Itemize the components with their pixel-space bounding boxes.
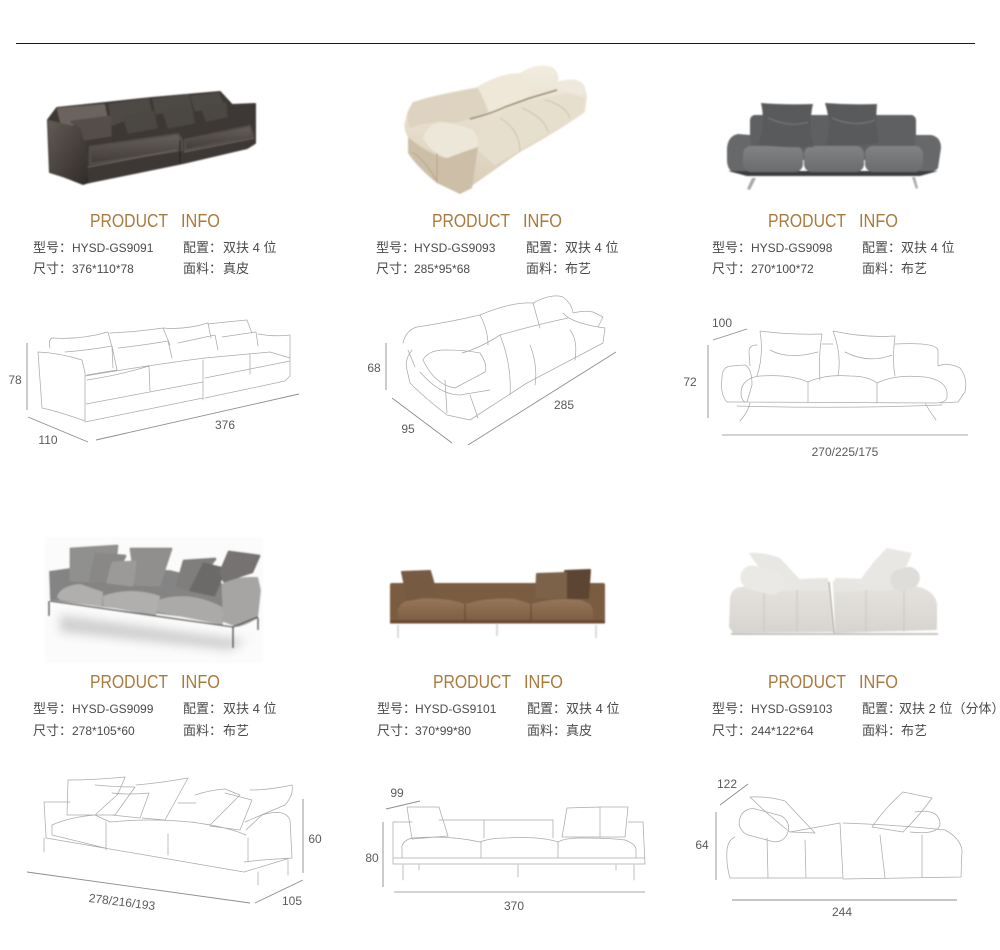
photo: grey sofa with cushions xyxy=(45,537,263,663)
line drawing: sofa 9098 xyxy=(722,331,966,421)
specs table: 面料： xyxy=(527,723,566,738)
panel: product HYSD-GS9103 xyxy=(695,548,1000,919)
specs table: 面料： xyxy=(183,261,222,276)
photo: dark leather sofa xyxy=(48,92,255,185)
line drawing: sofa 9099 xyxy=(44,777,292,885)
panel: product HYSD-GS9091 xyxy=(8,92,299,447)
specs table xyxy=(33,701,276,738)
specs table: HYSD-GS9103 xyxy=(751,702,833,716)
specs table: 型号： xyxy=(33,701,72,716)
specs table: 配置： xyxy=(862,240,901,255)
dimension: height 68: 68 xyxy=(367,361,381,375)
dimension: height 78: 78 xyxy=(8,373,22,387)
specs table: 278*105*60 xyxy=(72,724,135,738)
specs table: 配置： xyxy=(862,701,901,716)
heading: product info: PRODUCT xyxy=(90,672,168,692)
dimension: depth 100 xyxy=(712,316,747,340)
specs table: 双扶 4 位 xyxy=(901,240,954,255)
dimension: width 376: 376 xyxy=(215,418,235,432)
specs table: 型号： xyxy=(712,240,751,255)
heading: product info xyxy=(90,672,220,692)
line drawing: sofa 9103 xyxy=(727,792,962,879)
heading: product info: INFO xyxy=(859,672,898,692)
dimension: width 278/216/193 xyxy=(27,872,250,913)
dimension: depth 110 xyxy=(28,417,88,447)
dimension: height 80: 80 xyxy=(365,851,379,865)
dimension: width 285 xyxy=(468,352,616,445)
dimension: height 60: 60 xyxy=(308,832,322,846)
dimension: depth 110: 110 xyxy=(38,433,58,447)
specs table xyxy=(33,240,276,276)
heading: product info xyxy=(768,211,898,231)
dimension: depth 122 xyxy=(717,777,748,805)
heading: product info: PRODUCT xyxy=(768,211,846,231)
specs table: 双扶 4 位 xyxy=(565,240,618,255)
heading: product info: PRODUCT xyxy=(433,672,511,692)
specs table: 尺寸： xyxy=(376,261,415,276)
specs table: HYSD-GS9093 xyxy=(414,241,496,255)
dimension: depth 95 xyxy=(392,398,452,443)
specs table: 面料： xyxy=(526,261,565,276)
panel: product HYSD-GS9093 xyxy=(367,65,618,445)
specs table: 双扶 4 位 xyxy=(223,701,276,716)
specs table: 真皮 xyxy=(223,261,249,276)
line drawing: sofa 9093 xyxy=(403,296,605,420)
heading: product info xyxy=(433,672,563,692)
specs table: 双扶 4 位 xyxy=(566,701,619,716)
dimension: height 80 xyxy=(365,822,383,887)
specs table: 布艺 xyxy=(565,261,591,276)
dimension: width 244: 244 xyxy=(832,905,852,919)
specs table: 配置： xyxy=(526,240,565,255)
line drawing: sofa 9091 xyxy=(38,320,290,422)
dimension: height 64: 64 xyxy=(695,838,709,852)
dimension: width 270/225/175: 270/225/175 xyxy=(812,445,879,459)
specs table: 尺寸： xyxy=(33,723,72,738)
specs table: 型号： xyxy=(377,701,416,716)
specs table: 型号： xyxy=(33,240,72,255)
photo: brown leather sofa xyxy=(390,570,605,638)
specs table xyxy=(376,240,618,276)
specs table: 配置： xyxy=(183,240,222,255)
specs table: 370*99*80 xyxy=(415,724,471,738)
specs table: 尺寸： xyxy=(712,261,751,276)
panel: product HYSD-GS9099 xyxy=(27,537,322,913)
dimension: width 376 xyxy=(96,394,299,440)
specs table: 布艺 xyxy=(901,261,927,276)
specs table xyxy=(712,701,1000,738)
heading: product info: INFO xyxy=(524,672,563,692)
heading: product info xyxy=(90,211,220,231)
dimension: height 64 xyxy=(695,812,716,880)
specs table: 布艺 xyxy=(901,723,927,738)
specs table: 真皮 xyxy=(566,723,592,738)
heading: product info: PRODUCT xyxy=(432,211,510,231)
heading: product info: PRODUCT xyxy=(768,672,846,692)
dimension: height 68 xyxy=(367,343,386,390)
dimension: depth 100: 100 xyxy=(712,316,732,330)
specs table: 285*95*68 xyxy=(414,262,470,276)
specs table: 型号： xyxy=(712,701,751,716)
dimension: width 285: 285 xyxy=(554,398,574,412)
photo: cream modular sofa xyxy=(404,65,587,194)
dimension: depth 99: 99 xyxy=(390,786,404,800)
heading: product info: INFO xyxy=(181,672,220,692)
line drawing: sofa 9101 xyxy=(393,807,645,880)
specs table: 双扶 4 位 xyxy=(223,240,276,255)
photo: white split sofa xyxy=(729,548,938,634)
specs table xyxy=(377,701,619,738)
specs table: 270*100*72 xyxy=(751,262,814,276)
dimension: depth 95: 95 xyxy=(401,422,415,436)
specs table: 配置： xyxy=(527,701,566,716)
dimension: height 72 xyxy=(683,345,708,418)
specs table: 尺寸： xyxy=(712,723,751,738)
photo: grey fabric sofa xyxy=(727,103,941,190)
panel: product HYSD-GS9101 xyxy=(365,570,645,913)
bolster outlines xyxy=(736,806,940,845)
dimension: depth 105: 105 xyxy=(282,894,302,908)
specs table: 面料： xyxy=(183,723,222,738)
dimension: height 78 xyxy=(8,343,27,410)
dimension: width 278/216/193: 278/216/193 xyxy=(88,891,156,913)
specs table: HYSD-GS9099 xyxy=(72,702,154,716)
dimension: height 72: 72 xyxy=(683,375,697,389)
dimension: depth 99 xyxy=(386,786,420,809)
dimension: depth 122: 122 xyxy=(717,777,737,791)
specs table: 配置： xyxy=(183,701,222,716)
specs table: 244*122*64 xyxy=(751,724,814,738)
specs table xyxy=(712,240,954,276)
panel: product HYSD-GS9098 xyxy=(683,103,968,459)
specs table: 型号： xyxy=(376,240,415,255)
specs table: 尺寸： xyxy=(33,261,72,276)
top divider rule xyxy=(16,42,975,44)
heading: product info: INFO xyxy=(523,211,562,231)
specs table: 面料： xyxy=(862,723,901,738)
heading: product info xyxy=(768,672,898,692)
specs table: 尺寸： xyxy=(377,723,416,738)
dimension: height 60 xyxy=(303,799,322,873)
heading: product info: PRODUCT xyxy=(90,211,168,231)
heading: product info: INFO xyxy=(181,211,220,231)
specs table: 376*110*78 xyxy=(72,262,134,276)
dimension: depth 105 xyxy=(255,880,303,908)
heading: product info: INFO xyxy=(859,211,898,231)
dimension: width 370: 370 xyxy=(504,899,524,913)
specs table: HYSD-GS9101 xyxy=(415,702,497,716)
specs table: 面料： xyxy=(862,261,901,276)
specs table: 布艺 xyxy=(223,723,249,738)
specs table: HYSD-GS9091 xyxy=(72,241,154,255)
heading: product info xyxy=(432,211,562,231)
specs table: HYSD-GS9098 xyxy=(751,241,833,255)
